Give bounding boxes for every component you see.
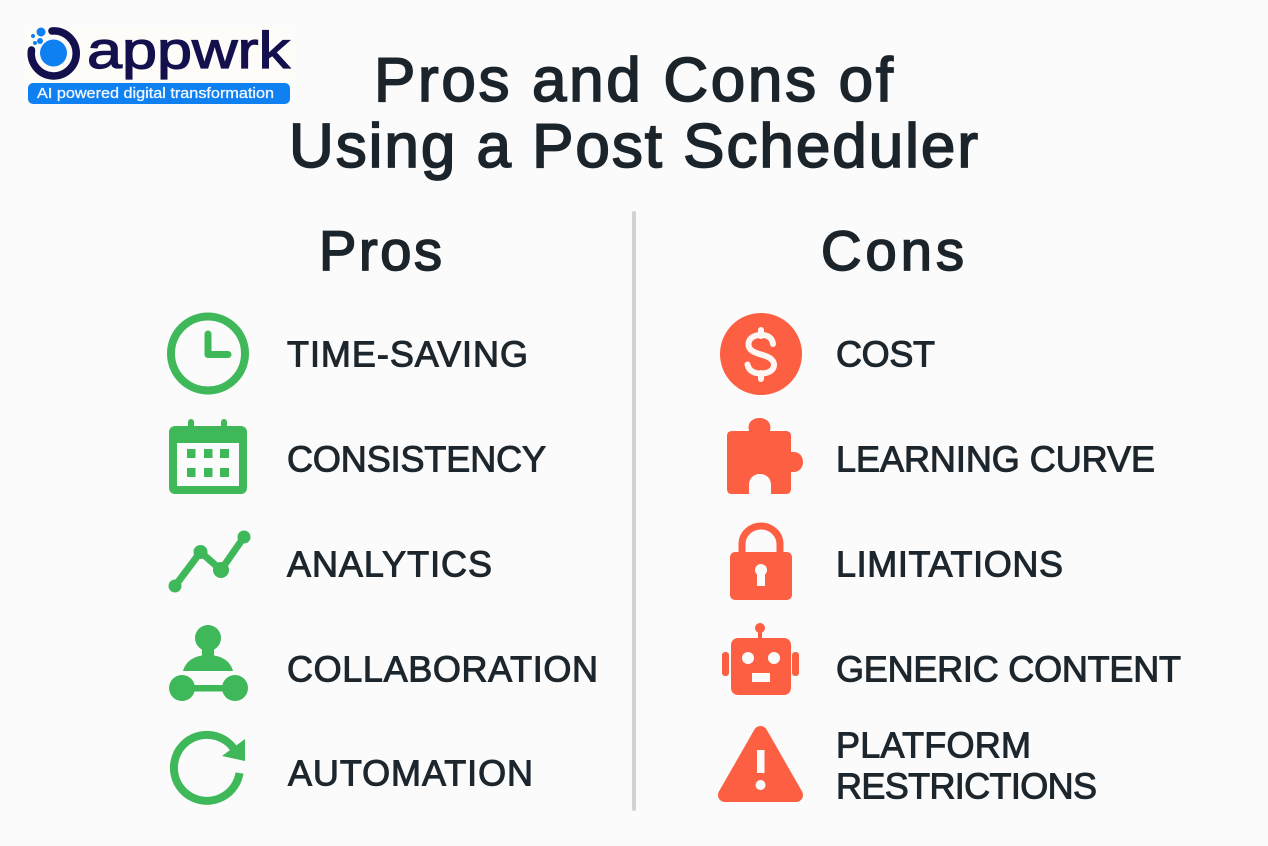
pro item: time-saving	[171, 316, 528, 390]
label: platform restrictions: PLATFORM	[836, 724, 1031, 766]
pro item: collaboration	[169, 625, 598, 701]
con item: platform restrictions	[725, 724, 1097, 806]
label: analytics: ANALYTICS	[287, 544, 492, 584]
logo: appwrk: AI powered digital transformation	[37, 85, 274, 102]
icon: connected people	[169, 625, 248, 701]
label: limitations: LIMITATIONS	[836, 544, 1063, 584]
label: collaboration: COLLABORATION	[287, 648, 598, 690]
pro item: consistency	[169, 419, 546, 494]
icon: puzzle piece	[727, 418, 803, 494]
center divider	[632, 211, 636, 811]
con item: cost	[720, 313, 935, 395]
label: time-saving: TIME-SAVING	[287, 334, 528, 374]
con item: learning curve	[727, 418, 1155, 494]
title	[289, 46, 978, 181]
icon: calendar	[169, 419, 247, 494]
panel: cons	[720, 219, 1181, 806]
pro item: analytics	[168, 530, 492, 592]
heading: Pros: Pros	[319, 219, 442, 282]
logo: appwrk: appwrk	[87, 22, 291, 80]
label: automation: AUTOMATION	[288, 752, 533, 794]
icon: refresh arrow	[174, 735, 245, 801]
con item: limitations	[730, 526, 1063, 600]
label: platform restrictions: RESTRICTIONS	[836, 766, 1097, 806]
title: Pros and Cons of	[374, 46, 894, 115]
con item: generic content	[722, 623, 1181, 695]
panel: pros	[168, 219, 598, 801]
icon: padlock	[730, 526, 792, 600]
icon: dollar coin	[720, 313, 802, 395]
title: Using a Post Scheduler	[289, 112, 978, 181]
icon: clock	[171, 316, 245, 390]
label: learning curve: LEARNING CURVE	[836, 438, 1155, 480]
label: platform restrictions	[836, 724, 1097, 806]
heading: Cons: Cons	[821, 219, 964, 282]
label: generic content: GENERIC CONTENT	[836, 648, 1181, 690]
icon: robot	[722, 623, 799, 695]
label: consistency: CONSISTENCY	[287, 438, 546, 480]
icon: warning triangle	[725, 733, 796, 795]
logo: appwrk	[25, 22, 293, 104]
icon: line chart	[168, 530, 250, 592]
label: cost: COST	[836, 334, 935, 374]
pro item: automation	[174, 735, 533, 801]
